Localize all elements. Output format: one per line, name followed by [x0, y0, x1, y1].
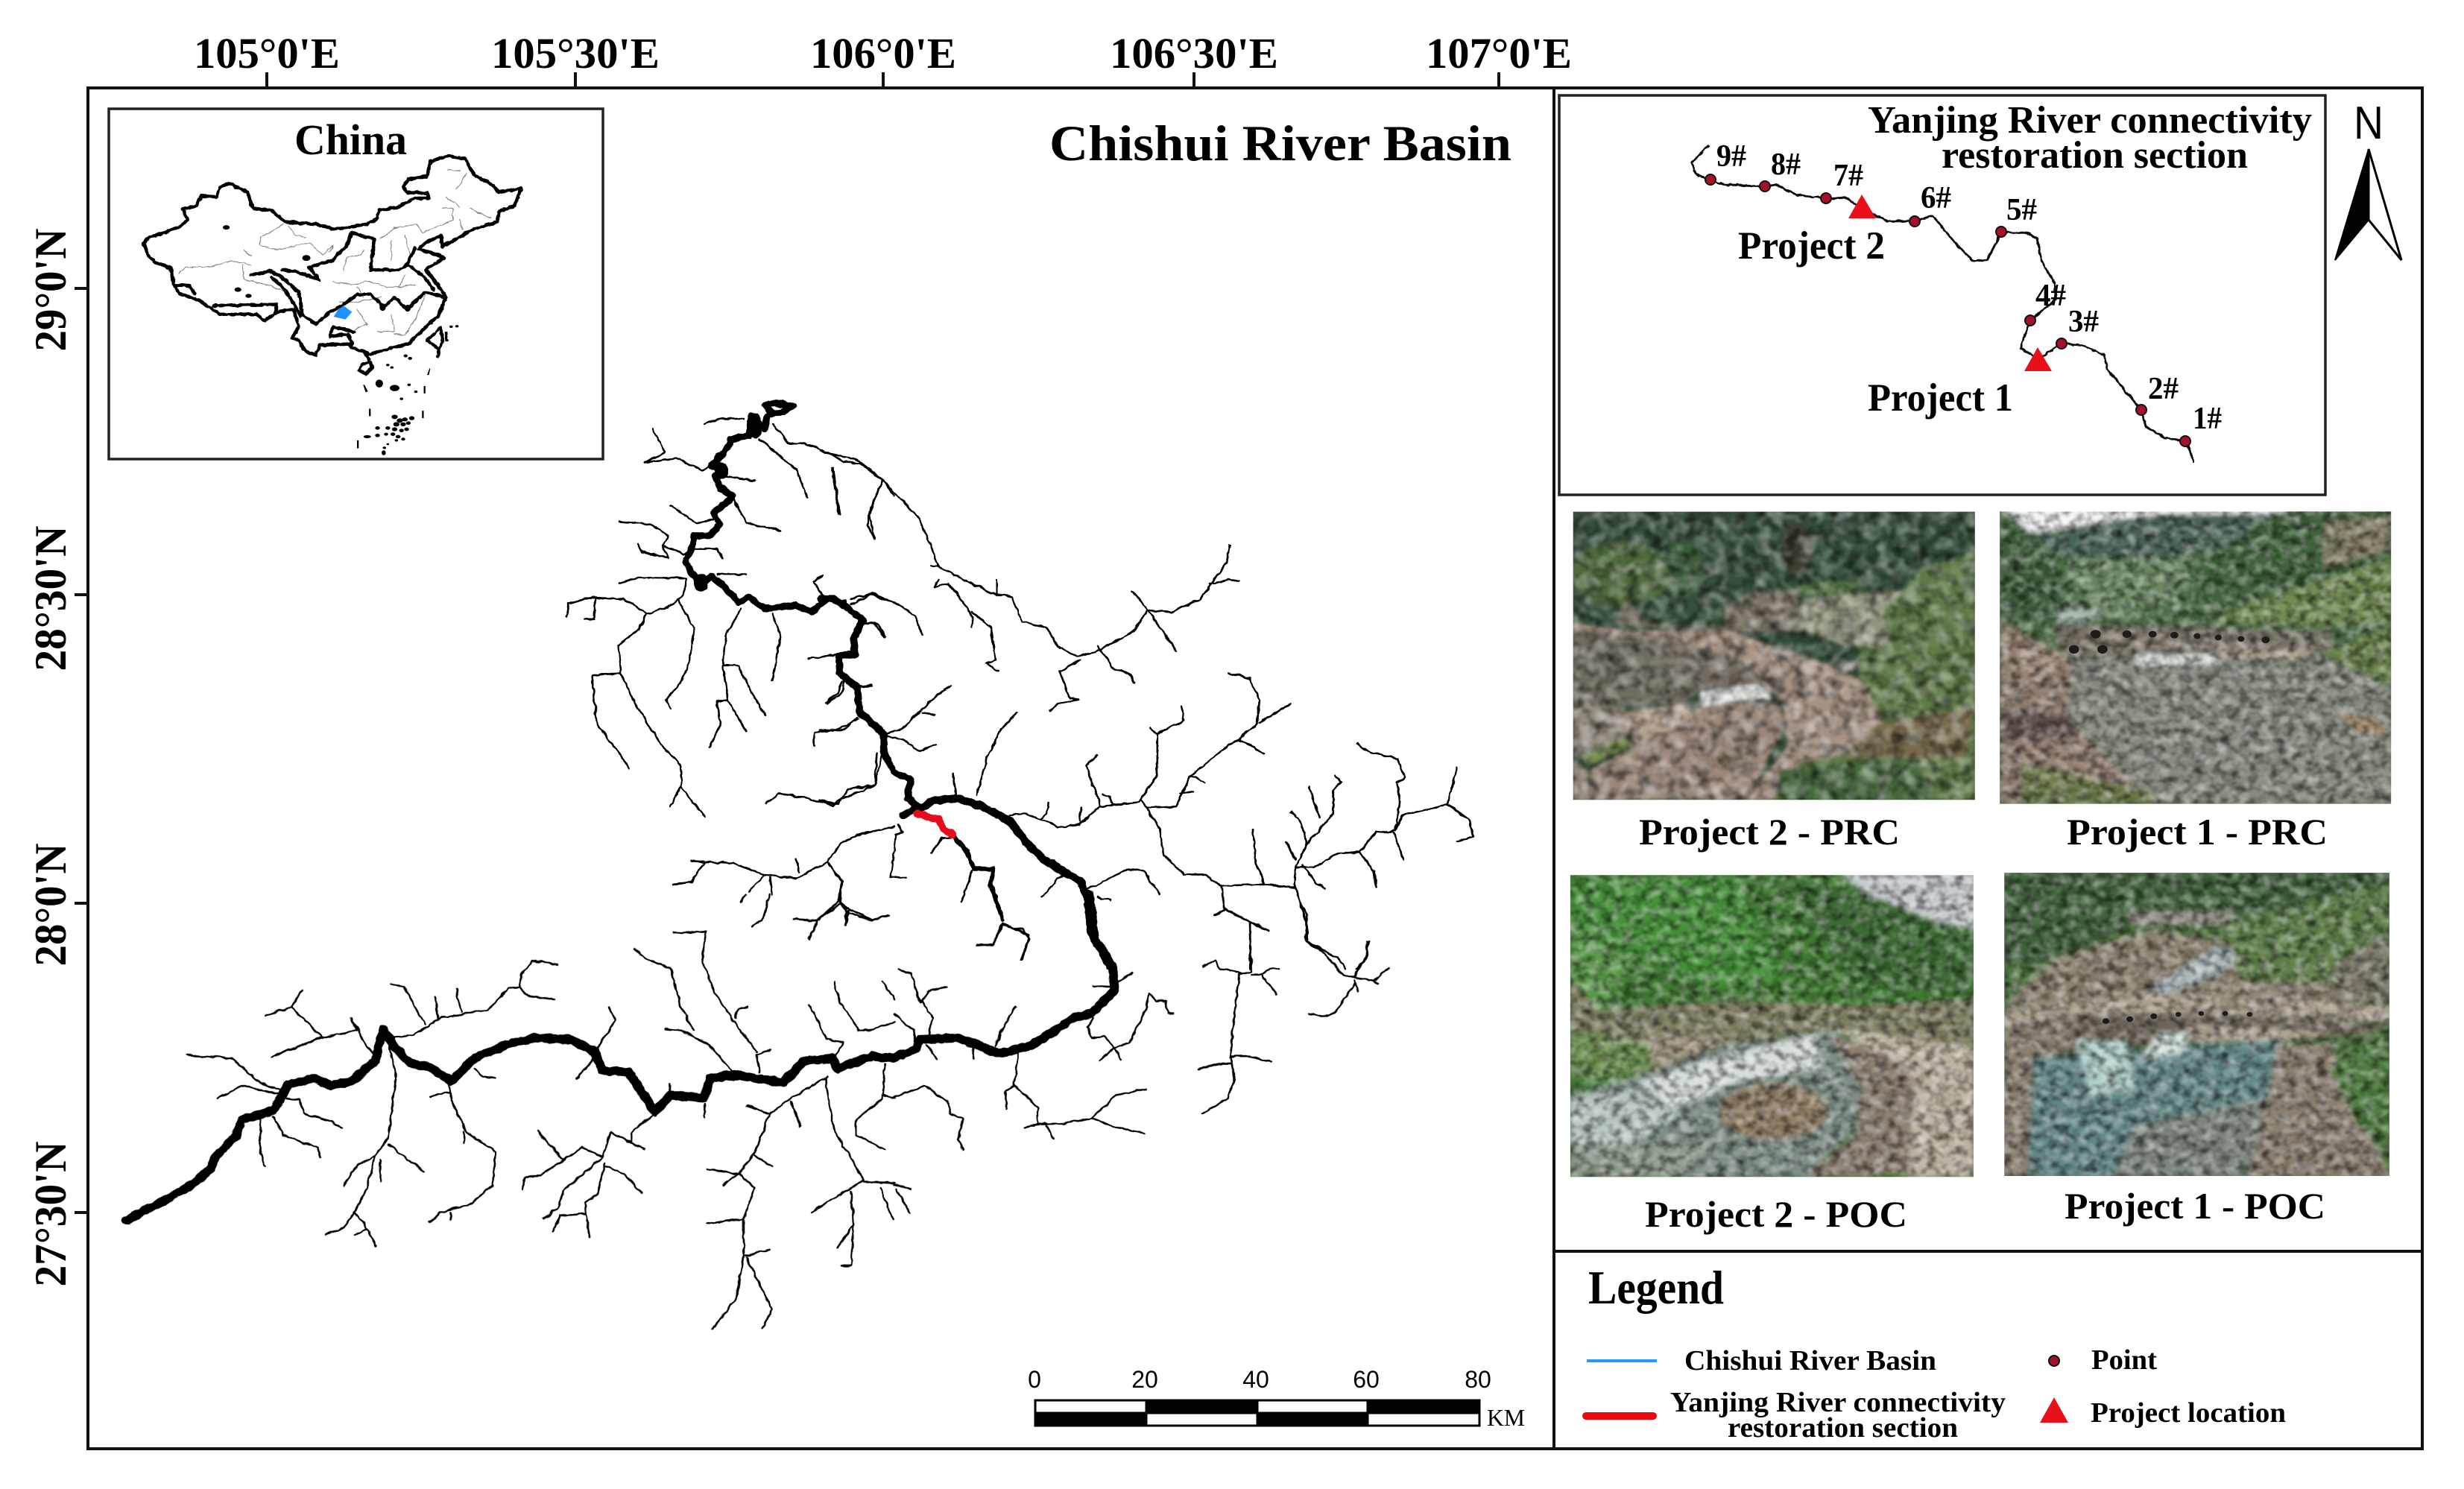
panel: Yanjing River section: Project 1	[1868, 376, 2013, 420]
photo: Project 1 POC	[1999, 868, 2398, 1182]
scale unit: KM	[1487, 1404, 1525, 1431]
point labels: 2#	[2148, 372, 2179, 406]
photo: Project 2 POC	[1565, 868, 1982, 1184]
longitude labels: 105°30'E	[491, 29, 660, 78]
panel: legend: restoration section	[1728, 1412, 1958, 1444]
project triangles	[1848, 195, 2052, 371]
scale bar	[1028, 1366, 1525, 1431]
legend: point symbol	[2049, 1356, 2059, 1366]
south-west tributaries and main stem	[127, 894, 894, 1328]
legend: project symbol	[2040, 1397, 2068, 1423]
point labels: 8#	[1771, 148, 1801, 182]
scale bar: 60	[1353, 1366, 1380, 1393]
Hainan and Taiwan	[358, 328, 446, 373]
thin tributaries north-west	[566, 403, 894, 894]
photo: Project 1 PRC	[1993, 507, 2398, 811]
river network	[127, 403, 1473, 1328]
point labels: 5#	[2006, 193, 2037, 227]
latitude labels: 28°30'N	[26, 526, 75, 671]
panel: legend: Point	[2091, 1344, 2157, 1376]
latitude labels: 28°0'N	[26, 844, 75, 966]
red section: Yanjing River connectivity restoration	[917, 814, 953, 835]
icon: north arrow: N	[2354, 98, 2384, 149]
point labels: 4#	[2035, 279, 2066, 313]
China outline	[143, 157, 521, 373]
legend heading: Legend	[1588, 1261, 1724, 1314]
panel: legend	[1582, 1261, 2286, 1444]
legend: basin line	[1587, 1359, 1657, 1362]
caption: Project 2 - PRC	[1639, 811, 1900, 853]
icon: Chishui basin location	[335, 307, 350, 318]
scale bar: 0	[1028, 1366, 1041, 1393]
point labels: 3#	[2068, 305, 2099, 339]
panel: Yanjing River section	[1559, 95, 2325, 495]
river course	[1692, 146, 2193, 462]
panel: legend: Chishui River Basin	[1684, 1345, 1936, 1376]
legend: restoration line	[1582, 1412, 1657, 1420]
inset title: China	[294, 116, 407, 164]
point labels: 7#	[1833, 159, 1863, 193]
point labels: 6#	[1921, 181, 1951, 215]
thin tributaries north-east	[820, 451, 1473, 969]
latitude labels: 29°0'N	[26, 228, 75, 352]
panel: Yanjing River section: restoration section	[1942, 134, 2248, 177]
longitude labels: 105°0'E	[194, 29, 340, 78]
longitude labels	[194, 29, 1572, 78]
latitude labels: 27°30'N	[26, 1142, 75, 1286]
islands and lakes	[223, 225, 458, 455]
panel: legend: Yanjing River connectivity	[1670, 1387, 2006, 1418]
caption: Project 2 - POC	[1645, 1193, 1907, 1235]
caption: Project 1 - POC	[2065, 1185, 2325, 1227]
longitude labels: 107°0'E	[1426, 29, 1572, 78]
section heading: Yanjing River connectivity	[1868, 99, 2312, 142]
point labels	[1716, 139, 2222, 436]
point labels: 9#	[1716, 139, 1746, 174]
longitude labels: 106°0'E	[810, 29, 956, 78]
project labels: Project 2	[1738, 224, 1885, 268]
icon: north arrow	[2335, 98, 2401, 260]
panel: China inset map	[109, 109, 603, 459]
point labels: 1#	[2193, 402, 2222, 436]
scale bar: 20	[1131, 1366, 1158, 1393]
scale bar: 80	[1465, 1366, 1491, 1393]
south-east tributaries and main stem	[894, 894, 1389, 1213]
photo: Project 2 PRC	[1565, 507, 1991, 805]
sampling points	[1705, 174, 2190, 446]
scale bar: 40	[1242, 1366, 1269, 1393]
caption: Project 1 - PRC	[2067, 811, 2328, 853]
latitude labels	[26, 228, 75, 1286]
title: Chishui River Basin	[1049, 115, 1511, 171]
panel: legend: Project location	[2091, 1397, 2286, 1429]
longitude labels: 106°30'E	[1110, 29, 1278, 78]
